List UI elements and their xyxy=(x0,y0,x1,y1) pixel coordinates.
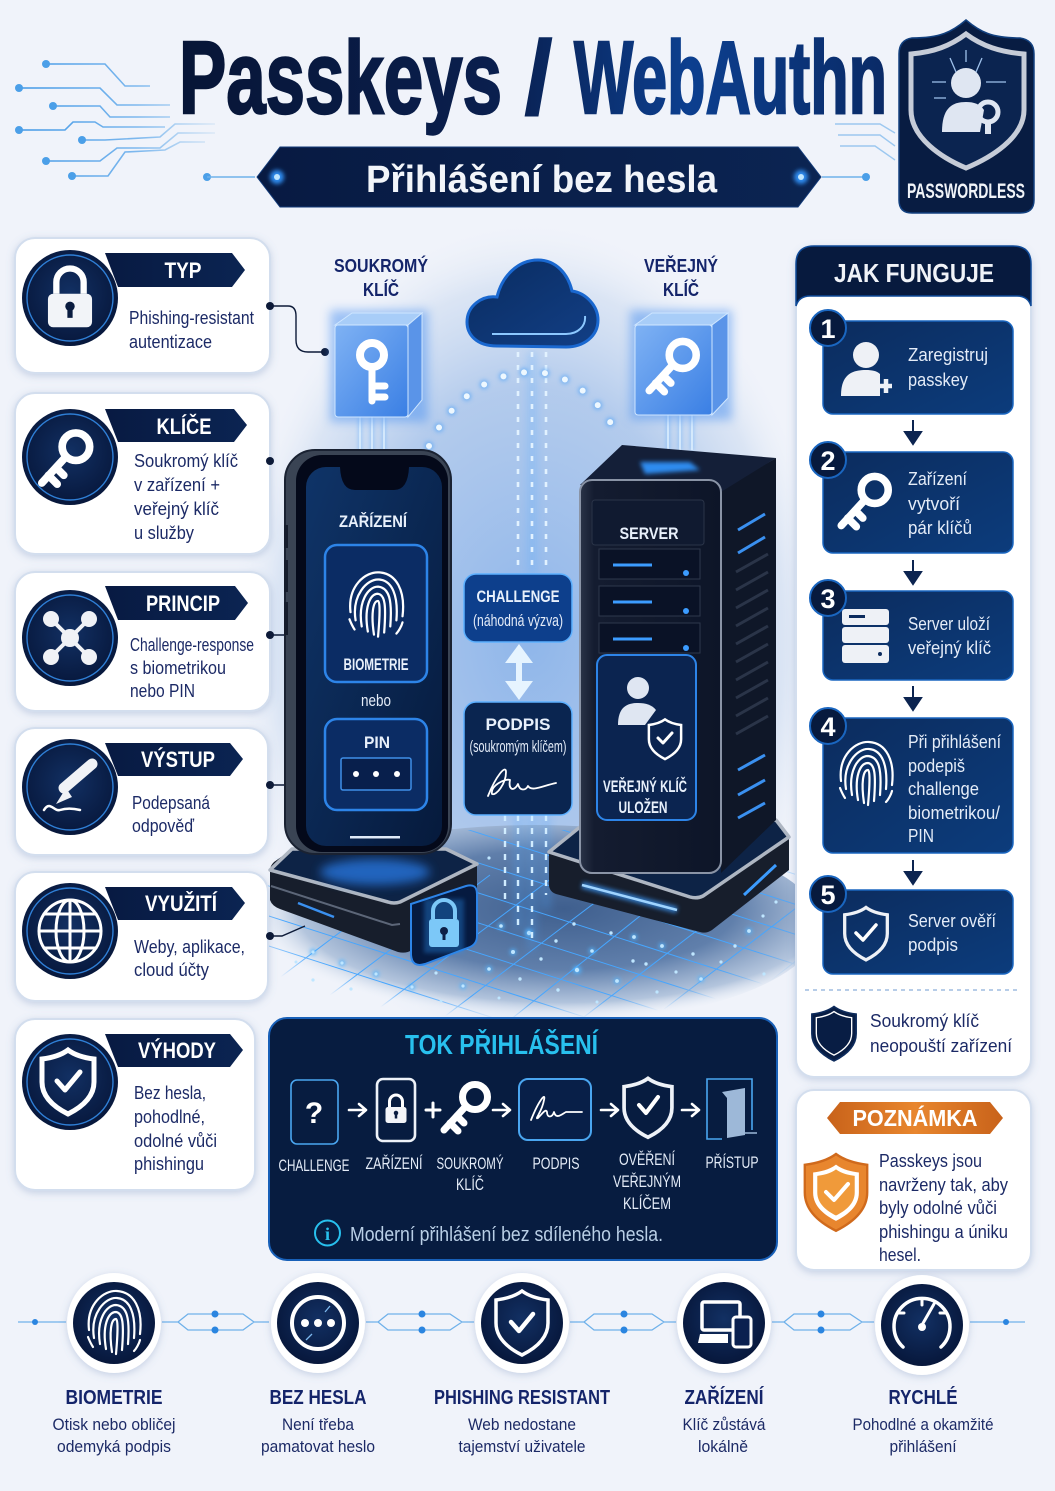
card text xyxy=(134,451,238,543)
icon: fingerprint xyxy=(67,1273,161,1373)
ribbon: VYUŽITÍ xyxy=(105,887,245,920)
icon: network xyxy=(22,590,118,686)
server drawers xyxy=(599,549,700,653)
card: VÝSTUP xyxy=(15,728,268,855)
feature: BEZ HESLA: Není třeba xyxy=(282,1415,354,1434)
right circuit decoration xyxy=(822,124,895,181)
title: / xyxy=(525,20,552,135)
card text: odpověď xyxy=(132,816,195,836)
PIN panel: PIN xyxy=(364,733,390,752)
feature: PHISHING RESISTANT: tajemství uživatele xyxy=(458,1437,586,1456)
public key cube xyxy=(630,310,732,420)
bottom connectors xyxy=(18,1310,1025,1334)
icon: key vertical xyxy=(360,343,385,401)
server side vents xyxy=(736,514,768,818)
card: PRINCIP xyxy=(15,572,270,711)
challenge box xyxy=(464,574,572,642)
PIN panel xyxy=(325,719,427,810)
feature: ZAŘÍZENÍ: Klíč zůstává xyxy=(682,1415,766,1434)
step 4: 4 xyxy=(820,712,836,742)
note ribbon xyxy=(827,1102,1003,1134)
card text: autentizace xyxy=(129,332,212,352)
arrow down xyxy=(905,860,921,884)
challenge box: (náhodná výzva) xyxy=(473,611,563,630)
step: challenge xyxy=(278,1080,350,1175)
step 5 xyxy=(810,876,1013,974)
step 5: 5 xyxy=(820,880,836,910)
step 4: challenge xyxy=(908,779,979,799)
stored key panel: VEŘEJNÝ KLÍČ xyxy=(603,777,687,796)
subtitle banner xyxy=(257,147,821,207)
icon: devices xyxy=(677,1273,771,1373)
flow panel: TOK PŘIHLÁŠENÍ xyxy=(269,1018,777,1260)
feature: ZAŘÍZENÍ xyxy=(677,1273,771,1456)
feature: RYCHLÉ xyxy=(852,1275,994,1456)
double arrow xyxy=(505,644,533,700)
feature: BIOMETRIE xyxy=(52,1273,176,1456)
feature: BIOMETRIE: odemyká podpis xyxy=(57,1437,171,1456)
step: private key xyxy=(436,1084,504,1194)
feature: BIOMETRIE: BIOMETRIE xyxy=(66,1387,162,1409)
passwordless badge xyxy=(899,20,1034,213)
step 2: Zařízení xyxy=(908,469,967,489)
icon: dots in circle xyxy=(271,1273,365,1373)
arrow xyxy=(349,1104,366,1116)
icon: key diagonal xyxy=(649,341,696,392)
note text xyxy=(879,1151,1008,1265)
icon: gauge xyxy=(875,1275,969,1375)
card: TYP xyxy=(15,238,270,373)
or label: nebo xyxy=(361,691,391,710)
signature box: (soukromým klíčem) xyxy=(470,737,566,756)
step: verification: KLÍČEM xyxy=(623,1194,671,1213)
note text: navrženy tak, aby xyxy=(879,1175,1008,1195)
step: challenge: CHALLENGE xyxy=(278,1156,350,1175)
ribbon: TYP xyxy=(105,253,245,287)
icon: shield xyxy=(22,1034,118,1130)
server label xyxy=(592,500,704,545)
feature: RYCHLÉ: přihlášení xyxy=(890,1437,957,1456)
feature: BIOMETRIE: Otisk nebo obličej xyxy=(52,1415,176,1434)
connector lines xyxy=(266,302,329,940)
note text: hesel. xyxy=(879,1245,921,1265)
card text: pohodlné, xyxy=(134,1107,205,1127)
title: Passkeys xyxy=(179,20,502,135)
card text: Phishing-resistant xyxy=(129,308,254,328)
subtitle banner: Přihlášení bez hesla xyxy=(366,159,718,201)
icon: shield xyxy=(475,1273,569,1373)
step 4: PIN xyxy=(908,826,934,846)
step: signature: PODPIS xyxy=(532,1154,580,1173)
card text: phishingu xyxy=(134,1154,204,1174)
step 4: biometrikou/ xyxy=(908,803,1000,823)
phone base xyxy=(270,848,477,953)
step 3 xyxy=(810,580,1013,680)
card text xyxy=(130,635,254,701)
signature box: PODPIS xyxy=(486,715,550,734)
center glow background xyxy=(230,220,830,1060)
arrow down xyxy=(905,560,921,584)
step: private key: KLÍČ xyxy=(456,1175,484,1194)
icon: orange shield xyxy=(805,1154,867,1231)
card text: s biometrikou xyxy=(130,658,226,678)
ribbon: PRINCIP: PRINCIP xyxy=(146,591,220,616)
ribbon: VÝSTUP: VÝSTUP xyxy=(141,747,215,772)
label: public key: KLÍČ xyxy=(663,279,699,300)
card text: Challenge-response xyxy=(130,635,254,655)
card text: Weby, aplikace, xyxy=(134,937,245,957)
label: private key: SOUKROMÝ xyxy=(334,255,428,276)
label: public key: VEŘEJNÝ xyxy=(644,255,718,276)
stored key panel xyxy=(597,655,696,820)
private key note: Soukromý klíč xyxy=(870,1011,979,1031)
card: KLÍČE xyxy=(15,393,270,554)
step: access xyxy=(706,1079,758,1172)
step: private key: SOUKROMÝ xyxy=(436,1154,504,1173)
phone label: ZAŘÍZENÍ xyxy=(339,512,408,531)
feature: BEZ HESLA: pamatovat heslo xyxy=(261,1437,375,1456)
cloud xyxy=(467,260,598,347)
card text: v zařízení + xyxy=(134,475,220,495)
card text: Soukromý klíč xyxy=(134,451,238,471)
feature: PHISHING RESISTANT: PHISHING RESISTANT xyxy=(434,1387,610,1409)
server label: SERVER xyxy=(620,524,678,543)
card text xyxy=(134,937,245,980)
step: access: PŘÍSTUP xyxy=(706,1153,758,1172)
step 1: passkey xyxy=(908,370,968,390)
plus xyxy=(426,1103,440,1117)
ribbon: VYUŽITÍ: VYUŽITÍ xyxy=(145,891,218,916)
step 2: vytvoří xyxy=(908,494,960,514)
card text xyxy=(132,793,211,836)
ribbon: TYP: TYP xyxy=(164,258,202,283)
card text: odolné vůči xyxy=(134,1131,217,1151)
step 3: veřejný klíč xyxy=(908,638,991,658)
panel: POZNÁMKA xyxy=(796,1090,1031,1270)
note text: Passkeys jsou xyxy=(879,1151,982,1171)
step 1: 1 xyxy=(820,314,836,344)
step: signature xyxy=(519,1079,591,1173)
server base xyxy=(549,820,789,933)
card: VYUŽITÍ xyxy=(15,872,268,1001)
icon: padlock xyxy=(22,250,118,346)
step: device: ZAŘÍZENÍ xyxy=(366,1154,423,1173)
card text: veřejný klíč xyxy=(134,499,219,519)
signature box xyxy=(464,702,572,815)
private key note xyxy=(812,1006,1012,1061)
stored key panel: ULOŽEN xyxy=(618,798,668,817)
ribbon: VÝHODY xyxy=(105,1034,243,1067)
step 2 xyxy=(810,442,1013,553)
step 3: 3 xyxy=(820,584,836,614)
floor grid xyxy=(268,825,795,1017)
arrow xyxy=(601,1104,618,1116)
panel header: JAK FUNGUJE xyxy=(834,258,994,288)
dotted arc xyxy=(429,372,618,446)
step 1: Zaregistruj xyxy=(908,345,988,365)
card text: u služby xyxy=(134,523,194,543)
card text: cloud účty xyxy=(134,960,209,980)
flow title: TOK PŘIHLÁŠENÍ xyxy=(405,1028,599,1060)
step 1 xyxy=(810,310,1013,414)
panel: JAK FUNGUJE xyxy=(796,246,1031,1077)
icon: globe xyxy=(22,883,118,979)
label: private key xyxy=(334,255,428,300)
feature: RYCHLÉ: RYCHLÉ xyxy=(888,1386,958,1409)
title xyxy=(179,20,887,135)
step 4 xyxy=(810,708,1013,853)
note text: phishingu a úniku xyxy=(879,1222,1008,1242)
step 5: podpis xyxy=(908,935,958,955)
feature: BEZ HESLA: BEZ HESLA xyxy=(270,1387,366,1409)
arrow down xyxy=(905,686,921,710)
feature: RYCHLÉ: Pohodlné a okamžité xyxy=(852,1415,994,1434)
label: private key: KLÍČ xyxy=(363,279,399,300)
note ribbon: POZNÁMKA xyxy=(852,1104,978,1131)
card: VÝHODY xyxy=(15,1019,255,1190)
ribbon: VÝHODY: VÝHODY xyxy=(138,1038,216,1063)
lock block xyxy=(411,885,477,965)
arrow xyxy=(682,1104,699,1116)
step 2: pár klíčů xyxy=(908,518,972,538)
data stream lines xyxy=(360,352,692,950)
ribbon: KLÍČE xyxy=(105,409,247,442)
biometric panel xyxy=(325,545,427,682)
ribbon: PRINCIP xyxy=(105,586,248,620)
biometric panel: BIOMETRIE xyxy=(344,655,408,674)
ribbon: KLÍČE: KLÍČE xyxy=(156,414,212,439)
icon: key xyxy=(22,409,118,505)
step 3: Server uloží xyxy=(908,614,990,634)
left circuit decoration xyxy=(15,60,255,181)
note text: byly odolné vůči xyxy=(879,1198,997,1218)
step 5: Server ověří xyxy=(908,911,996,931)
phone xyxy=(285,450,451,854)
private key cube xyxy=(330,310,428,422)
card text xyxy=(129,308,254,352)
card text: Podepsaná xyxy=(132,793,211,813)
label: public key xyxy=(644,255,718,300)
server xyxy=(549,445,789,933)
feature: PHISHING RESISTANT: Web nedostane xyxy=(468,1415,576,1434)
card text: nebo PIN xyxy=(130,681,195,701)
info note: i xyxy=(325,1224,330,1244)
icon: pen xyxy=(22,739,118,835)
ribbon: VÝSTUP xyxy=(105,743,243,776)
feature: BEZ HESLA xyxy=(261,1273,375,1456)
challenge box: CHALLENGE xyxy=(476,587,560,606)
icon: lock xyxy=(424,899,464,953)
step: challenge: ? xyxy=(305,1097,323,1130)
card text: Bez hesla, xyxy=(134,1083,206,1103)
step: device xyxy=(366,1079,423,1173)
step: verification: OVĚŘENÍ xyxy=(619,1150,675,1169)
feature: PHISHING RESISTANT xyxy=(434,1273,610,1456)
step 2: 2 xyxy=(820,446,836,476)
step 4: podepiš xyxy=(908,756,965,776)
card text xyxy=(134,1083,217,1174)
step: verification: VEŘEJNÝM xyxy=(613,1172,681,1191)
feature: ZAŘÍZENÍ: ZAŘÍZENÍ xyxy=(684,1385,764,1409)
arrow xyxy=(493,1104,510,1116)
panel header xyxy=(796,246,1031,306)
arrow down xyxy=(905,420,921,444)
private key note: neopouští zařízení xyxy=(870,1036,1012,1056)
feature: ZAŘÍZENÍ: lokálně xyxy=(698,1437,748,1456)
info note: Moderní přihlášení bez sdíleného hesla. xyxy=(350,1224,663,1246)
step 4: Při přihlášení xyxy=(908,732,1001,752)
step: verification xyxy=(613,1078,681,1213)
